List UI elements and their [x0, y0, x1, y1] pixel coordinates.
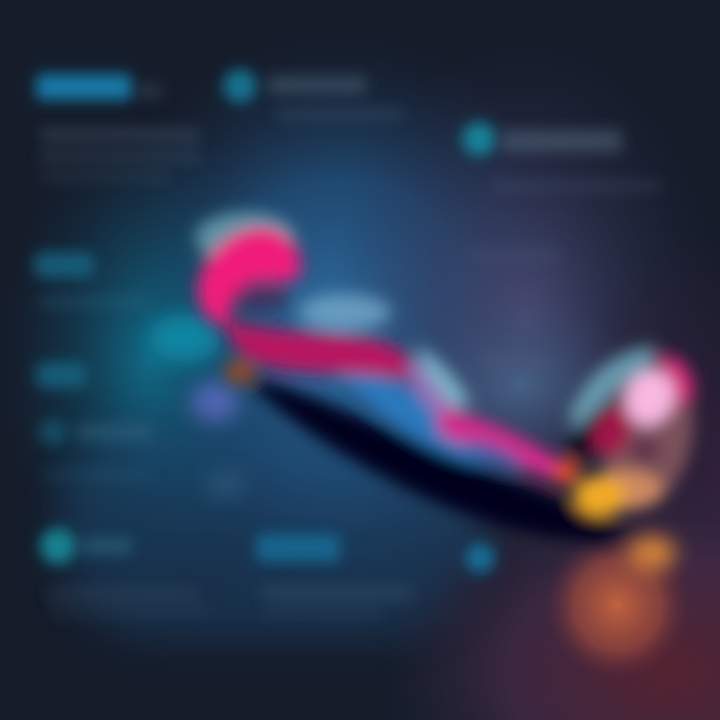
ribbon: lilac bend — [405, 360, 458, 425]
centre small label and left glows — [149, 314, 244, 496]
ribbon: blue underside — [462, 433, 528, 479]
ring: sepia body — [592, 356, 704, 514]
ring: teal left arc — [568, 345, 655, 435]
bottom centre block — [256, 534, 412, 618]
top left heading block — [36, 74, 200, 182]
ribbon illustration — [195, 212, 704, 542]
ring: crimson core — [586, 401, 638, 463]
ring: pale pink face — [618, 363, 682, 433]
ribbon: orange end — [587, 470, 663, 510]
top right heading block — [462, 122, 660, 369]
pale wave highlight — [415, 345, 472, 408]
bottom left block — [40, 528, 208, 616]
ribbon: pink head — [198, 226, 301, 325]
ribbon: dark notch — [234, 287, 290, 309]
ribbon: blue mid section — [335, 371, 500, 465]
ribbon: dark shadow body — [245, 378, 625, 542]
pale blue highlight — [299, 294, 391, 330]
top centre heading block — [223, 69, 404, 120]
ribbon: orange red start — [225, 359, 255, 385]
ring: black inner shard — [566, 400, 615, 462]
ribbon: red join — [553, 459, 579, 485]
ribbon: magenta lower band — [438, 408, 562, 480]
left column blocks — [34, 252, 154, 480]
ring: pink top — [655, 354, 695, 410]
halo: behind pink head — [195, 212, 295, 264]
orange floor reflection — [545, 530, 690, 680]
ribbon: yellow end glow — [574, 476, 626, 516]
ribbon: crimson upper band — [222, 318, 420, 378]
bottom right marker — [465, 543, 495, 573]
ring: dim centre — [630, 437, 660, 463]
